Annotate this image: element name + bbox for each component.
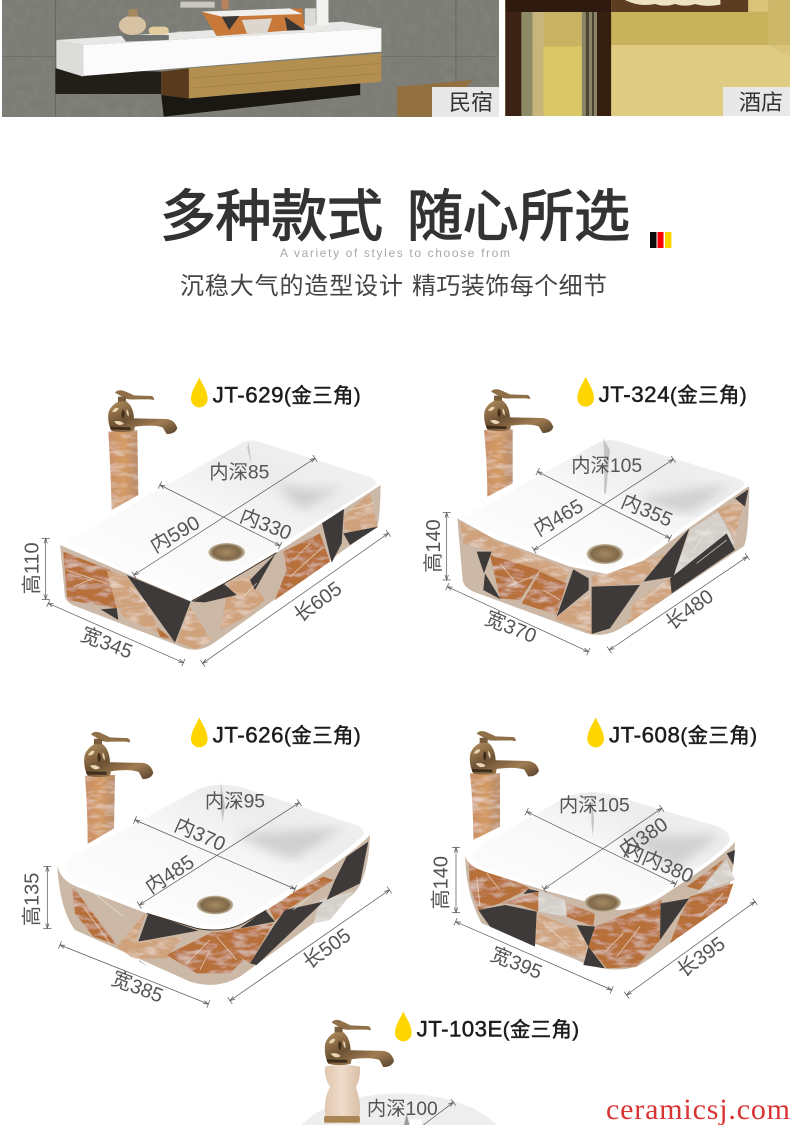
- dimension labels: 宽370: [482, 607, 540, 648]
- dimension labels: 长395: [673, 932, 730, 982]
- title: [160, 185, 630, 248]
- dimension labels: 内590: [146, 511, 204, 558]
- dimension labels: 内330: [237, 504, 295, 545]
- basin body: [60, 483, 381, 650]
- panel: basin JT-608: [430, 717, 757, 995]
- subtitle: [180, 273, 607, 300]
- faucet: [108, 390, 177, 510]
- subtitle: 沉稳大气的造型设计: [180, 273, 403, 300]
- dimension labels: 宽385: [108, 967, 166, 1008]
- dimension labels: 内深85: [209, 461, 269, 483]
- subtitle: 精巧装饰每个细节: [412, 273, 607, 300]
- dimension labels: 内深105: [559, 794, 630, 816]
- english subtitle: A variety of styles to choose from: [280, 246, 510, 260]
- label box 酒店: 酒店: [739, 90, 783, 115]
- dimension labels: [20, 791, 355, 1008]
- dimension label: 内深100: [367, 1098, 438, 1120]
- hotel scene: [505, 0, 790, 116]
- dimension labels: [20, 461, 346, 664]
- panel: photo 酒店: [505, 0, 790, 116]
- label box 酒店: [723, 87, 790, 116]
- dimension labels: 长480: [661, 585, 718, 635]
- dimension labels: 高140: [430, 856, 453, 909]
- dimension labels: 内465: [530, 494, 587, 541]
- basin bowl: [60, 437, 381, 602]
- dimension labels: 内深105: [571, 455, 642, 477]
- icon: drop: [587, 717, 604, 747]
- dimension labels: 内内380: [620, 838, 697, 888]
- title: 多种款式: [160, 185, 383, 248]
- basin body: [457, 487, 749, 635]
- dimension labels: [422, 455, 718, 648]
- panel: basin JT-324: [422, 377, 749, 652]
- basin bowl: [465, 788, 735, 912]
- faucet: [484, 389, 553, 497]
- panel: photo 民宿: [2, 0, 499, 117]
- icon: drop: [191, 717, 208, 747]
- dimension labels: 长505: [299, 924, 355, 974]
- dimension labels: 高110: [20, 542, 43, 594]
- dimension labels: 长605: [290, 577, 346, 627]
- model label: JT-103E(金三角): [417, 1017, 579, 1042]
- label box 民宿: [432, 87, 499, 117]
- model label: JT-626(金三角): [213, 723, 361, 748]
- dimension labels: 高140: [422, 519, 445, 573]
- icon: drop: [191, 377, 208, 407]
- shelf scene: [2, 0, 496, 117]
- dimension labels: 内355: [618, 490, 676, 532]
- faucet: [84, 732, 153, 844]
- basin bowl: [457, 436, 749, 574]
- dimension lines: [47, 803, 389, 1004]
- faucet: [470, 731, 539, 840]
- faucet: [324, 1020, 394, 1123]
- basin body: [57, 835, 370, 985]
- basin bowl: [57, 780, 370, 930]
- dimension labels: 内380: [615, 813, 672, 862]
- model label: JT-629(金三角): [213, 383, 361, 408]
- model label: JT-608(金三角): [609, 723, 757, 748]
- panel: basin JT-629: [20, 377, 388, 664]
- label box 民宿: 民宿: [449, 90, 493, 115]
- icon: German flag stripes: [650, 232, 672, 248]
- dimension labels: 内485: [141, 850, 198, 899]
- dimension labels: 宽345: [78, 623, 136, 664]
- model label: JT-324(金三角): [599, 382, 747, 407]
- dimension labels: 内370: [171, 813, 229, 856]
- dimension lines: [447, 459, 747, 652]
- dimension labels: 高135: [20, 873, 43, 926]
- icon: drop: [395, 1011, 412, 1041]
- basin bowl: [302, 1093, 497, 1125]
- basin body: [465, 842, 735, 969]
- panel: basin JT-626: [20, 717, 389, 1008]
- dimension labels: 宽395: [487, 943, 545, 984]
- dimension labels: [430, 794, 730, 984]
- dimension line: [423, 1102, 453, 1125]
- icon: drop: [577, 377, 594, 407]
- panel: basin JT-103E: [302, 1011, 579, 1125]
- title: 随心所选: [407, 185, 630, 248]
- dimension lines: [46, 458, 388, 663]
- dimension labels: 内深95: [205, 791, 265, 813]
- dimension lines: [456, 808, 755, 995]
